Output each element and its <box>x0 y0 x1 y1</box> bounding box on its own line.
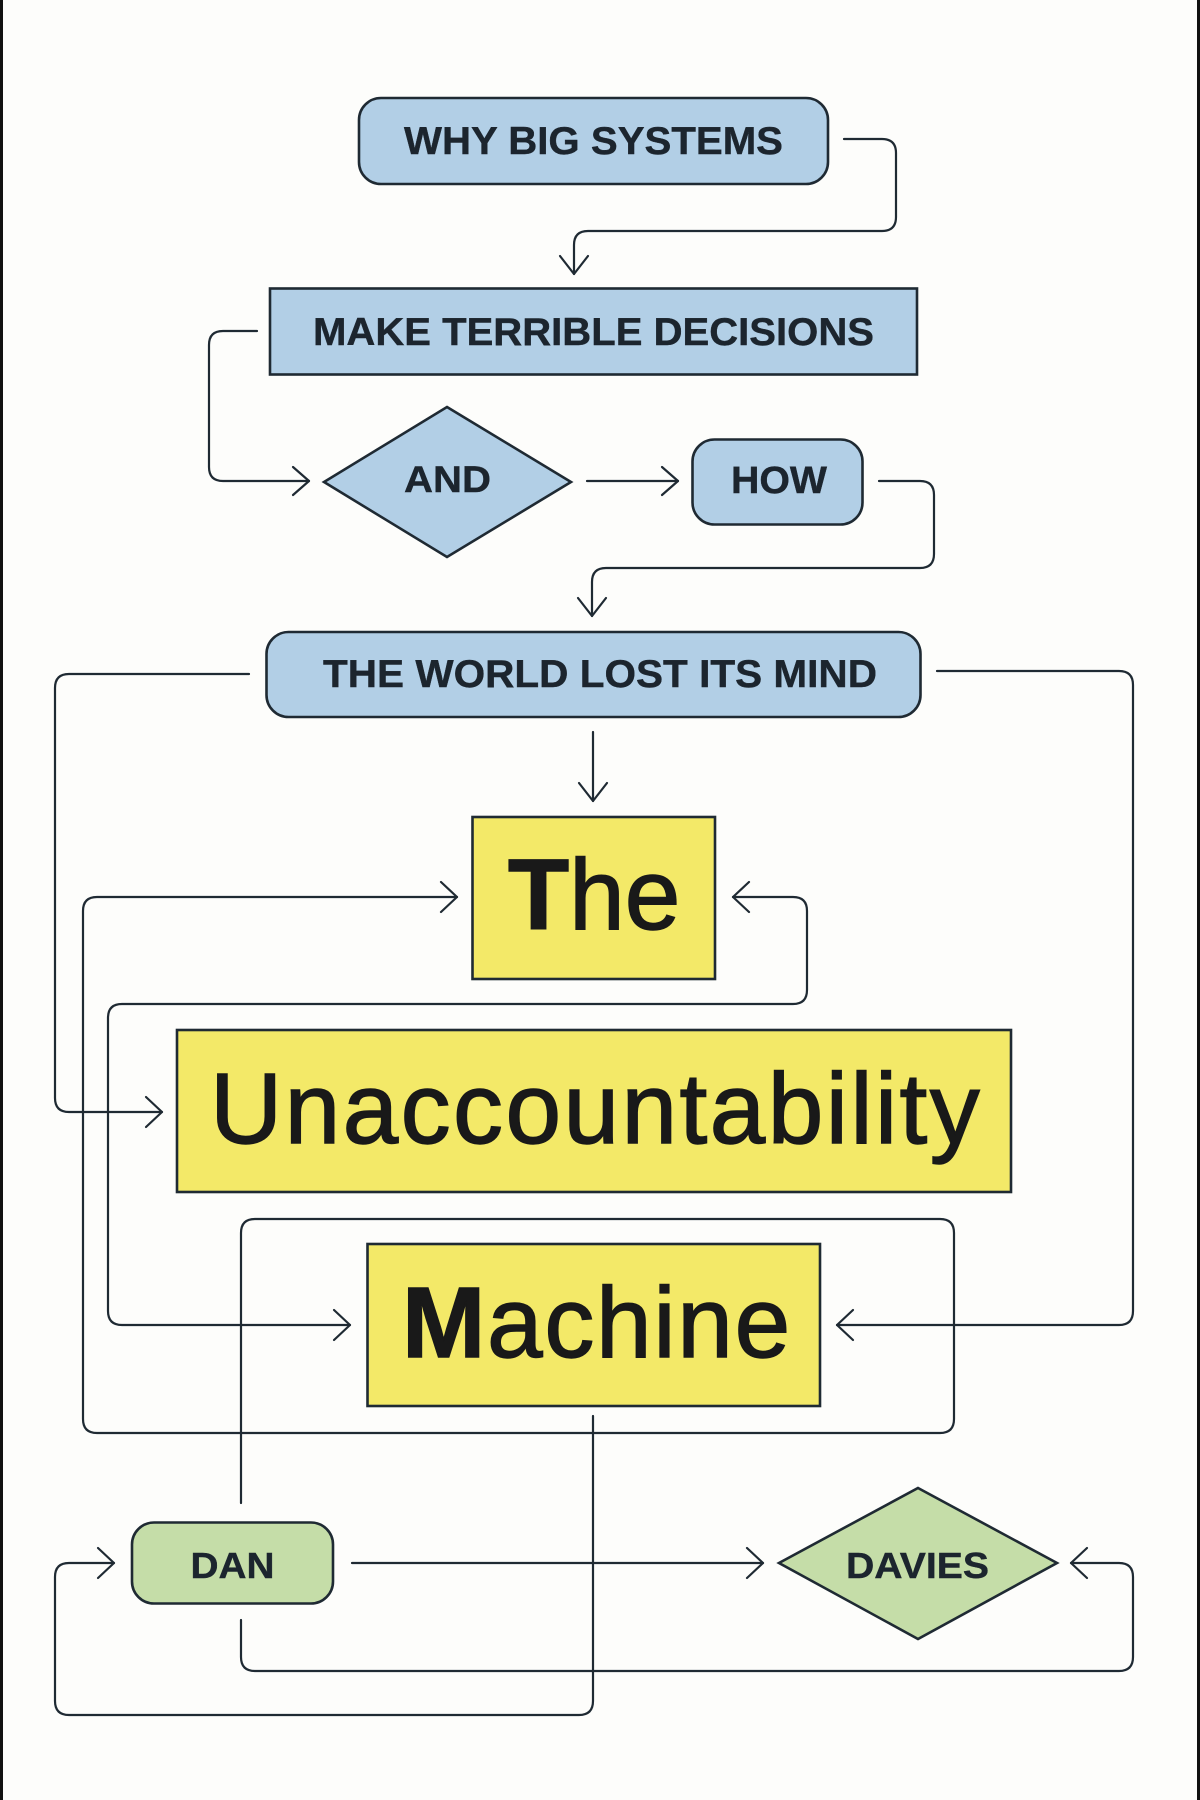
box: unaccountability: Unaccountability <box>210 1053 982 1165</box>
box: dan: DAN <box>190 1545 274 1586</box>
arrow: how to the world lost its mind <box>578 481 934 616</box>
box: why big systems <box>359 98 828 184</box>
box: machine: Machine <box>402 1267 792 1379</box>
box: the world lost its mind: THE WORLD LOST ITS MIND <box>323 653 877 696</box>
box: dan <box>132 1522 333 1604</box>
arrow: and to how <box>587 467 678 495</box>
arrow: dan loop to the <box>83 882 954 1503</box>
box: make terrible decisions: MAKE TERRIBLE DECISIONS <box>313 311 874 354</box>
arrow: dan to davies lower loop <box>241 1548 1133 1671</box>
box: machine <box>368 1244 820 1406</box>
box: make terrible decisions <box>270 288 917 374</box>
diamond: davies <box>779 1488 1057 1639</box>
arrow: dan to davies <box>352 1548 763 1578</box>
arrow: the world lost its mind to machine <box>837 671 1133 1340</box>
diamond: and: AND <box>404 459 491 500</box>
box: how: HOW <box>731 460 827 502</box>
box: how <box>692 440 862 524</box>
box: unaccountability <box>177 1030 1011 1192</box>
diamond: and <box>324 407 571 557</box>
box: why big systems: WHY BIG SYSTEMS <box>404 120 783 163</box>
box: the: The <box>508 839 680 951</box>
box: the world lost its mind <box>266 632 920 717</box>
diamond: davies: DAVIES <box>846 1545 989 1586</box>
arrow: make terrible decisions to and <box>209 331 309 495</box>
arrow: why big systems to make terrible decisions <box>560 139 896 274</box>
arrow: the world lost its mind to the <box>579 732 607 801</box>
arrow: the world lost its mind to unaccountability <box>55 674 249 1127</box>
arrow: the loop to machine <box>108 882 807 1340</box>
arrow: machine to dan <box>55 1416 593 1715</box>
box: the <box>472 817 715 979</box>
